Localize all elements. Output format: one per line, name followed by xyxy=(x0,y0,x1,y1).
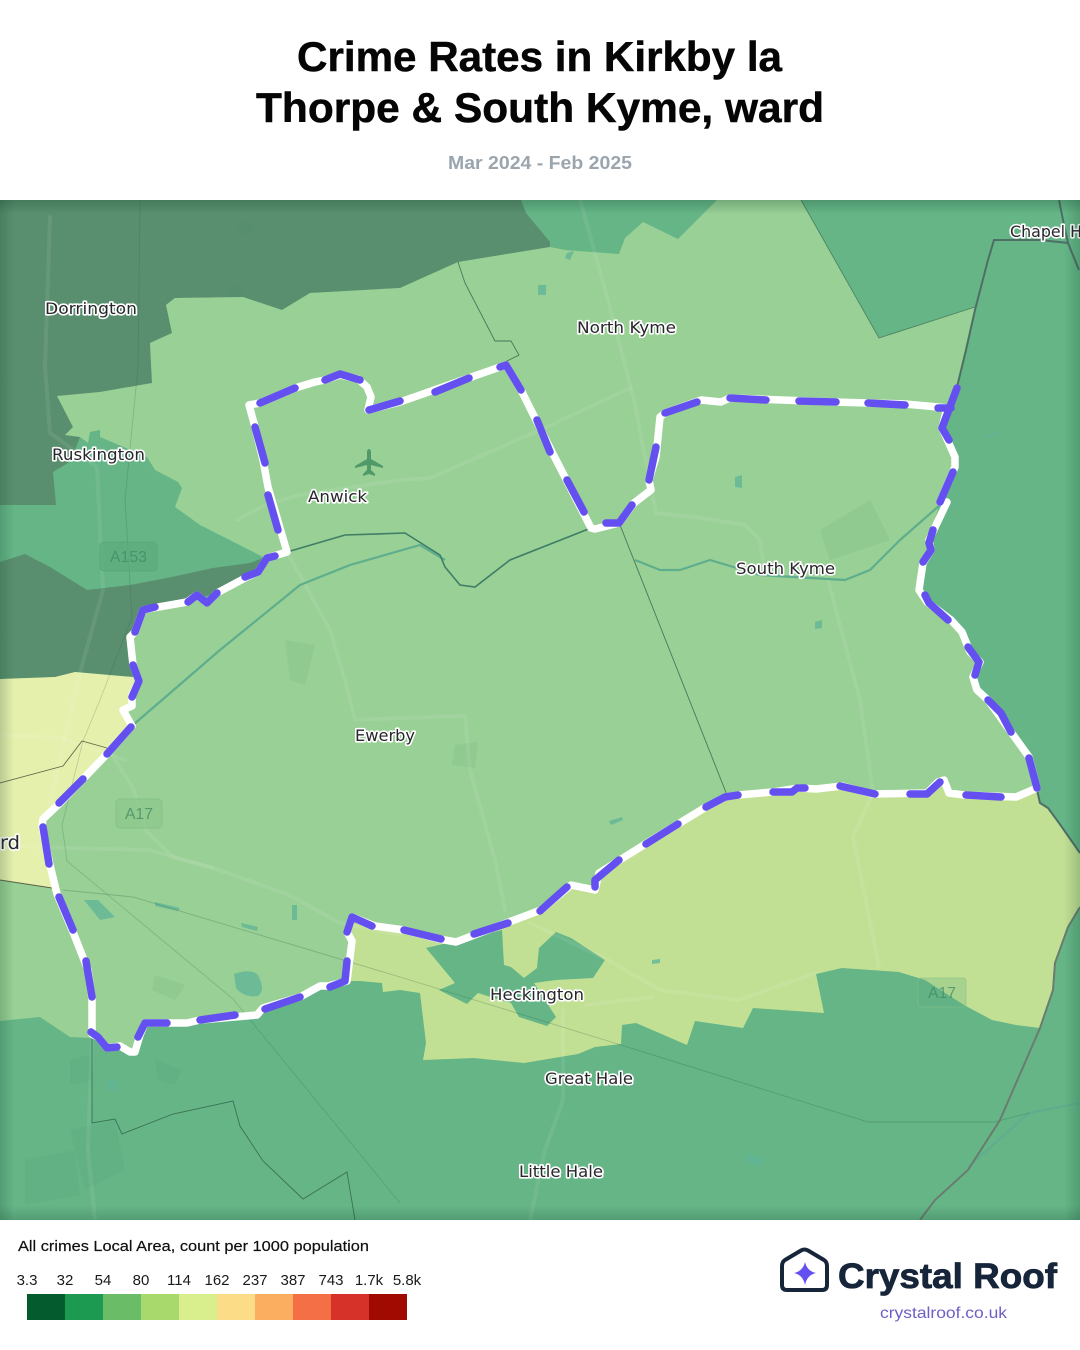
legend scale values: 32 xyxy=(57,1272,73,1289)
ward boundary: white base line xyxy=(42,365,1037,1052)
map region: medium green base xyxy=(0,200,1080,1220)
road shield: A153: A153 xyxy=(110,549,147,566)
legend scale values: 237 xyxy=(242,1272,268,1289)
map water: ponds and lakes xyxy=(84,251,998,1167)
label: North Kyme: North Kyme xyxy=(577,318,676,337)
legend scale values: 5.8k xyxy=(393,1272,422,1289)
legend scale values: 54 xyxy=(95,1272,111,1289)
legend scale values: 3.3 xyxy=(17,1272,37,1289)
map region: dark north-west area xyxy=(0,200,550,505)
title: Thorpe & South Kyme, ward xyxy=(256,84,824,131)
subtitle: date range: Mar 2024 - Feb 2025 xyxy=(448,153,632,173)
road shield: A17 west xyxy=(116,799,162,828)
road shield: A17 east: A17 xyxy=(928,985,956,1002)
road shield: A17 east xyxy=(918,978,966,1007)
label: South Kyme: South Kyme xyxy=(736,559,835,578)
label: Heckington: Heckington xyxy=(490,985,584,1004)
road shield: A17 west: A17 xyxy=(125,806,153,823)
logo url: crystalroof.co.uk xyxy=(880,1305,1008,1322)
panel: choropleth map xyxy=(0,200,1080,1220)
label: Dorrington: Dorrington xyxy=(45,299,137,318)
logo wordmark: Crystal Roof xyxy=(838,1257,1057,1296)
map canal: teal waterways xyxy=(134,506,939,724)
road shield: A153 xyxy=(100,542,157,571)
logo: Crystal Roof xyxy=(782,1250,1057,1322)
legend title: All crimes Local Area, count per 1000 population xyxy=(18,1238,369,1255)
ward boundary: purple dashes xyxy=(43,365,1037,1048)
legend scale values xyxy=(17,1272,422,1289)
legend scale values: 1.7k xyxy=(355,1272,384,1289)
map region: pale yellow west area xyxy=(0,672,139,888)
map field patches xyxy=(25,219,890,1205)
legend scale values: 162 xyxy=(204,1272,230,1289)
legend colour swatches xyxy=(27,1294,407,1320)
legend scale values: 114 xyxy=(167,1272,191,1289)
label: Ewerby: Ewerby xyxy=(355,726,415,745)
label: Ruskington: Ruskington xyxy=(52,445,145,464)
icon: airfield plane xyxy=(355,449,383,476)
place labels xyxy=(0,222,1080,1181)
title xyxy=(256,33,824,131)
label: Anwick: Anwick xyxy=(308,487,368,506)
map roads xyxy=(43,200,818,1220)
map river: dark line xyxy=(287,528,591,587)
legend scale values: 387 xyxy=(280,1272,306,1289)
legend scale values: 80 xyxy=(133,1272,149,1289)
map region: dark west band xyxy=(0,554,263,679)
map region: light green including the ward xyxy=(0,200,1037,1052)
legend xyxy=(17,1238,422,1320)
map vignette xyxy=(0,200,1080,1220)
map region: Heckington medium green enclave xyxy=(426,930,605,1026)
map thin boundary lines xyxy=(0,200,1029,1220)
label: Little Hale: Little Hale xyxy=(519,1162,603,1181)
label: Great Hale: Great Hale xyxy=(545,1069,633,1088)
map grey boundary: east side xyxy=(920,200,1080,1220)
map region: yellow-green south area xyxy=(347,780,1080,1063)
icon: house with star xyxy=(782,1250,827,1290)
label: clipped town name at left edge: rd xyxy=(0,832,20,854)
title: Crime Rates in Kirkby la xyxy=(297,33,783,80)
legend scale values: 743 xyxy=(318,1272,344,1289)
